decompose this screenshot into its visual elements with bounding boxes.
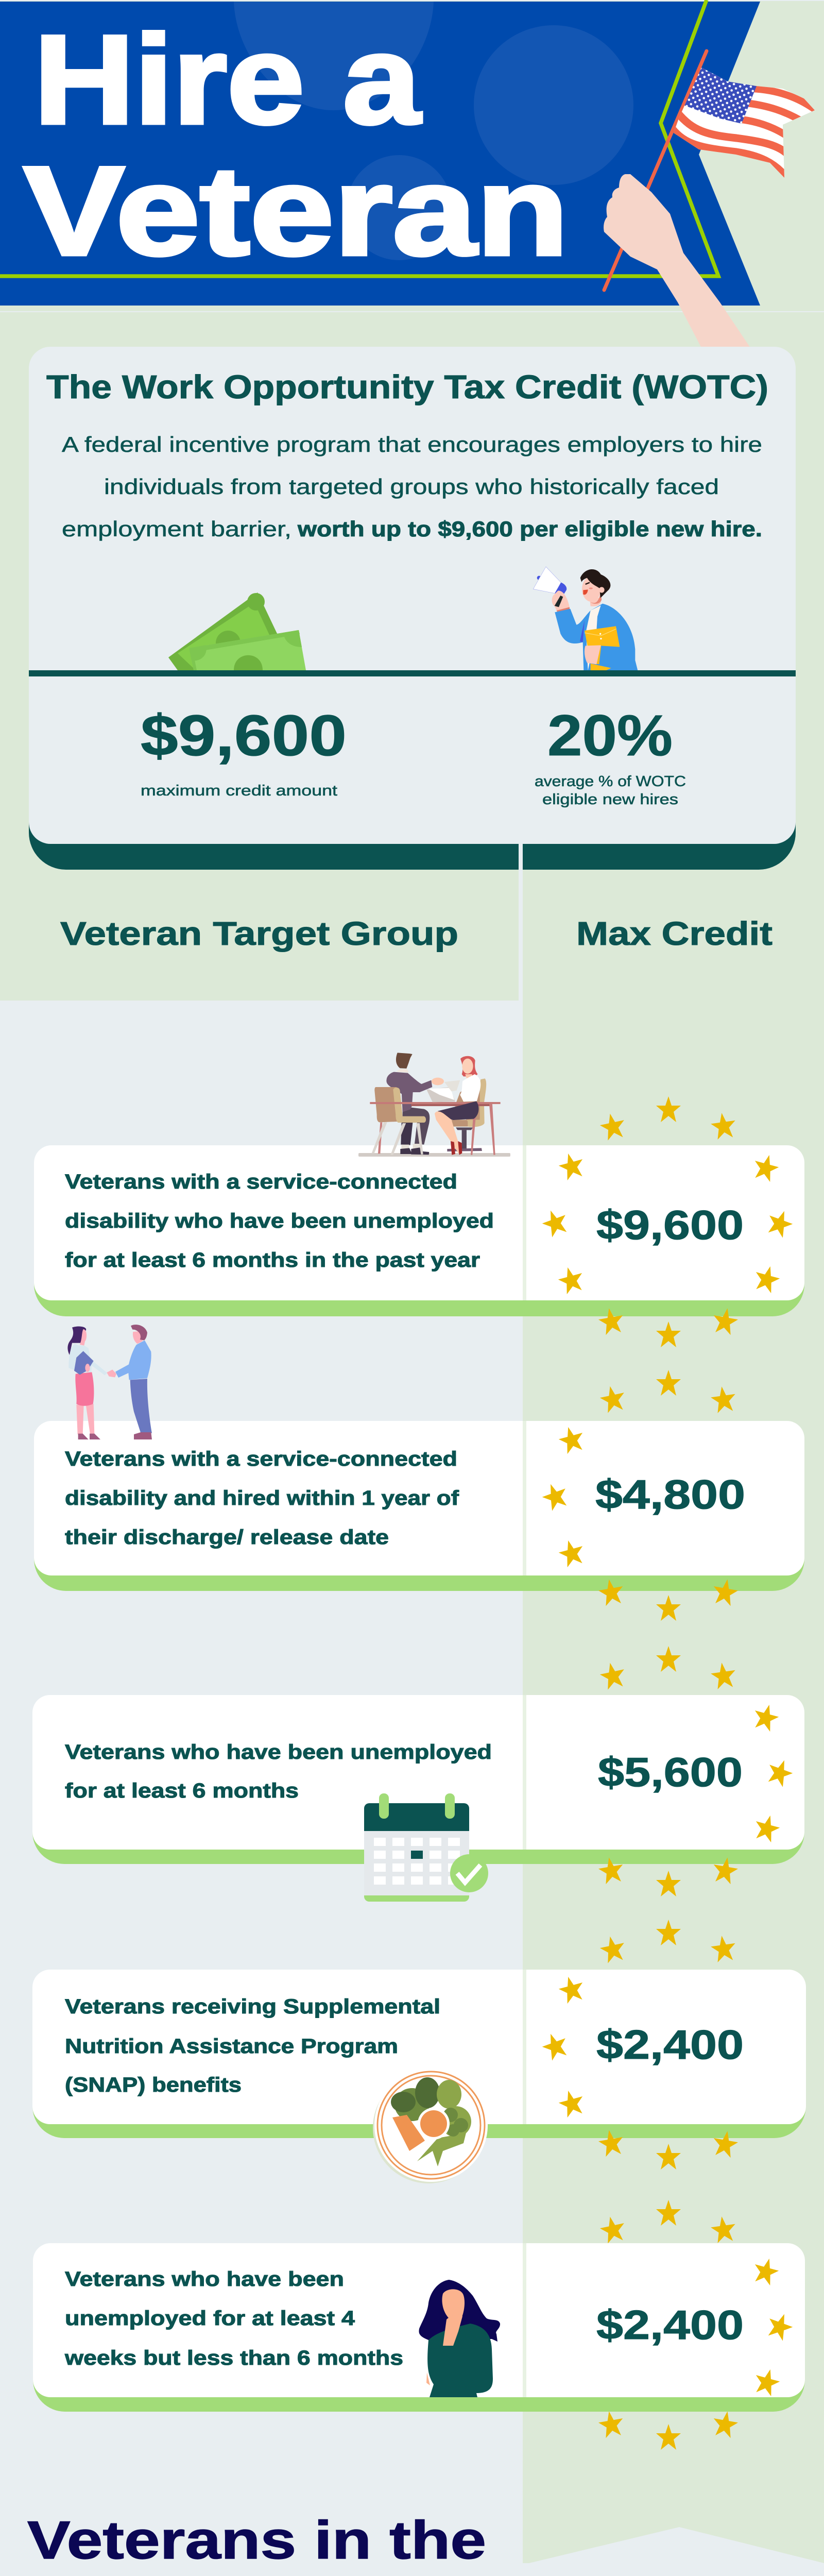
stat: maximum credit: $9,600	[141, 703, 347, 768]
icon: handshake	[67, 1325, 152, 1439]
text: row 4: Veterans receiving Supplemental	[65, 1995, 440, 2018]
stat: maximum credit: maximum credit amount	[141, 783, 337, 799]
row 5 card	[33, 2243, 805, 2450]
title: Veteran	[24, 140, 569, 281]
text: row 5	[64, 2268, 403, 2369]
price: row 3: $5,600	[598, 1749, 743, 1795]
text: row 2: disability and hired within 1 year of	[65, 1487, 459, 1510]
stars: row 3 card	[597, 1702, 796, 1896]
row 2 card	[34, 1421, 804, 1621]
row 3 card	[32, 1695, 804, 1896]
stat: average percent	[535, 703, 686, 808]
paragraph: WOTC description	[62, 432, 762, 541]
text: row 1: for at least 6 months in the past year	[65, 1249, 480, 1272]
text: row 4: (SNAP) benefits	[65, 2074, 242, 2096]
heading: workforce statistics: Veterans in the	[27, 2511, 486, 2570]
icon: person with megaphone	[533, 567, 638, 670]
panel: WOTC intro	[29, 347, 796, 870]
text: row 2	[65, 1448, 459, 1549]
price: row 1: $9,600	[596, 1202, 744, 1248]
divider bar	[29, 670, 796, 676]
paragraph: WOTC description: worth up to $9,600 per eligible new hire.	[297, 517, 762, 541]
stat: average percent: average % of WOTC	[535, 773, 686, 790]
banner	[0, 0, 760, 306]
icon: plate of food	[373, 2069, 488, 2183]
text: row 5: unemployed for at least 4	[65, 2307, 355, 2330]
text: row 4: Nutrition Assistance Program	[65, 2035, 398, 2058]
text: row 1	[65, 1171, 494, 1272]
stars: row 2 card	[539, 1424, 740, 1621]
text: row 3	[65, 1741, 492, 1802]
table header	[60, 844, 772, 1001]
price: row 4: $2,400	[596, 2022, 744, 2067]
stars: row 1 card	[539, 1150, 796, 1347]
text: row 3: for at least 6 months	[65, 1780, 299, 1802]
icon: thinking woman	[419, 2280, 500, 2397]
text: row 5: Veterans who have been	[65, 2268, 344, 2291]
paragraph: WOTC description: A federal incentive program that encourages employers to hire	[62, 432, 762, 456]
text: row 5: weeks but less than 6 months	[64, 2347, 403, 2369]
table header: Max Credit	[576, 915, 772, 952]
text: row 2: their discharge/ release date	[65, 1526, 389, 1549]
price: row 2: $4,800	[595, 1471, 745, 1517]
heading: WOTC: The Work Opportunity Tax Credit (WOTC)	[46, 368, 768, 405]
row 4 card	[32, 1970, 806, 2170]
stars: row 1 upper	[598, 1096, 737, 1141]
text: row 4	[65, 1995, 440, 2096]
icon: money bills	[168, 592, 306, 670]
price: row 5: $2,400	[596, 2302, 744, 2348]
table header: Veteran Target Group	[60, 915, 458, 952]
stat: maximum credit	[141, 703, 347, 799]
icon: hand holding flag	[604, 51, 819, 348]
text: row 2: Veterans with a service-connected	[65, 1448, 457, 1470]
text: row 1: disability who have been unemployed	[65, 1210, 494, 1232]
stars: row 5 card	[597, 2256, 796, 2450]
icon: calendar with check	[364, 1793, 488, 1902]
icon: meeting at desk	[358, 1053, 510, 1157]
paragraph: WOTC description: individuals from targeted groups who historically faced	[104, 474, 719, 499]
paragraph: WOTC description: employment barrier,	[62, 517, 291, 541]
row 1 card	[34, 1145, 804, 1347]
stars: row 2 upper	[598, 1370, 737, 1414]
stars: row 3 upper	[598, 1646, 737, 1690]
stars: row 5 upper	[598, 2200, 737, 2244]
stars: row 4 upper	[598, 1920, 737, 1964]
stars: row 4 card	[539, 1974, 740, 2170]
title: Hire a	[34, 9, 421, 150]
text: row 1: Veterans with a service-connected	[65, 1171, 457, 1193]
stat: average percent: 20%	[547, 703, 673, 768]
title	[24, 9, 569, 281]
text: row 3: Veterans who have been unemployed	[65, 1741, 492, 1764]
stat: average percent: eligible new hires	[542, 791, 678, 808]
